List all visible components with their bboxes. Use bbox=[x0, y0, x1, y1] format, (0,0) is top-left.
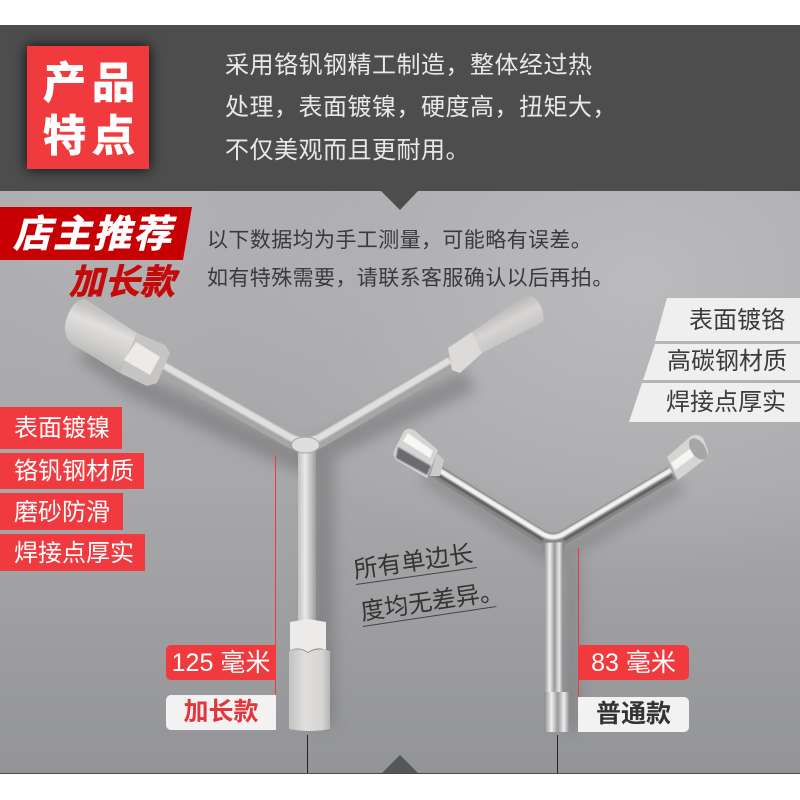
arms highlight bbox=[434, 467, 671, 537]
junction ball bbox=[292, 437, 320, 453]
left hex facet bbox=[124, 342, 160, 375]
small wrench shadow bbox=[425, 475, 680, 730]
tag: chrome vanadium steel bbox=[0, 453, 144, 489]
left socket collar bbox=[430, 453, 444, 476]
left socket bbox=[394, 429, 438, 478]
dark header band bbox=[0, 25, 800, 191]
arms highlight bbox=[163, 360, 450, 441]
tag text: chrome plated: 表面镀铬 bbox=[689, 307, 785, 334]
bottom hex nut bbox=[290, 619, 326, 652]
arms dark stripe bbox=[436, 474, 672, 540]
left red feature tags bbox=[0, 407, 145, 571]
bottom leg shaft bbox=[298, 450, 316, 621]
extended model title: 加长款 bbox=[69, 263, 176, 302]
black tick long bbox=[307, 735, 308, 773]
heading badge: product features bbox=[27, 46, 149, 169]
tag: nickel plated bbox=[0, 407, 122, 449]
tag: frosted anti-slip bbox=[0, 493, 123, 530]
bottom rule bbox=[0, 773, 800, 774]
tag text: high carbon steel: 高碳钢材质 bbox=[667, 348, 787, 375]
left hex nut bbox=[120, 333, 170, 386]
note line 1: 以下数据均为手工测量，可能略有误差。 bbox=[207, 229, 592, 252]
model label extended: 加长款 bbox=[183, 698, 258, 726]
black tick short bbox=[557, 735, 558, 773]
red measuring line long bbox=[275, 456, 276, 696]
red measuring line short bbox=[578, 548, 579, 698]
heading line 2: 特点 bbox=[43, 113, 141, 161]
heading line 1: 产品 bbox=[43, 60, 141, 108]
measurement note bbox=[207, 229, 614, 290]
description line 2: 处理，表面镀镍，硬度高，扭矩大， bbox=[225, 94, 617, 121]
model label standard: 普通款 bbox=[596, 700, 671, 728]
right socket bbox=[667, 435, 708, 480]
tag: thick welds: 焊接点厚实 bbox=[14, 540, 134, 566]
length label 83 mm bbox=[578, 645, 689, 680]
right socket body bbox=[472, 295, 544, 353]
tag text: thick welds: 焊接点厚实 bbox=[666, 389, 786, 416]
bottom leg bbox=[541, 542, 566, 692]
grey photo background bbox=[0, 191, 800, 773]
left socket highlight bbox=[403, 433, 433, 458]
right socket opening bbox=[685, 435, 711, 463]
handwritten note line 1: 所有单边长 bbox=[352, 541, 475, 584]
note line 2: 如有特殊需要，请联系客服确认以后再拍。 bbox=[207, 267, 614, 290]
tag: frosted anti-slip: 磨砂防滑 bbox=[14, 498, 110, 526]
description line 3: 不仅美观而且更耐用。 bbox=[225, 137, 470, 164]
left socket body bbox=[65, 299, 137, 373]
shadows bbox=[85, 350, 470, 725]
description line 1: 采用铬钒钢精工制造，整体经过热 bbox=[225, 52, 592, 79]
arms shaft bbox=[163, 362, 452, 444]
handwritten note line 2: 度均无差异。 bbox=[359, 578, 505, 626]
model label extended bbox=[166, 695, 276, 730]
tag: nickel plated: 表面镀镍 bbox=[14, 415, 110, 442]
header description text bbox=[225, 52, 617, 164]
tag: thick welds bbox=[0, 534, 145, 571]
model label standard bbox=[578, 697, 689, 732]
bottom socket bbox=[544, 692, 569, 732]
length label 83 mm: 83 毫米 bbox=[591, 649, 676, 677]
right socket highlight bbox=[671, 449, 694, 470]
bottom socket body bbox=[289, 649, 330, 731]
tag: chrome vanadium steel: 铬钒钢材质 bbox=[14, 458, 134, 485]
arms bbox=[434, 470, 672, 540]
right hex nut bbox=[448, 332, 482, 373]
length label 125 mm: 125 毫米 bbox=[172, 649, 270, 677]
left socket dark band bbox=[396, 447, 431, 475]
banner text: 店主推荐 bbox=[13, 214, 173, 256]
